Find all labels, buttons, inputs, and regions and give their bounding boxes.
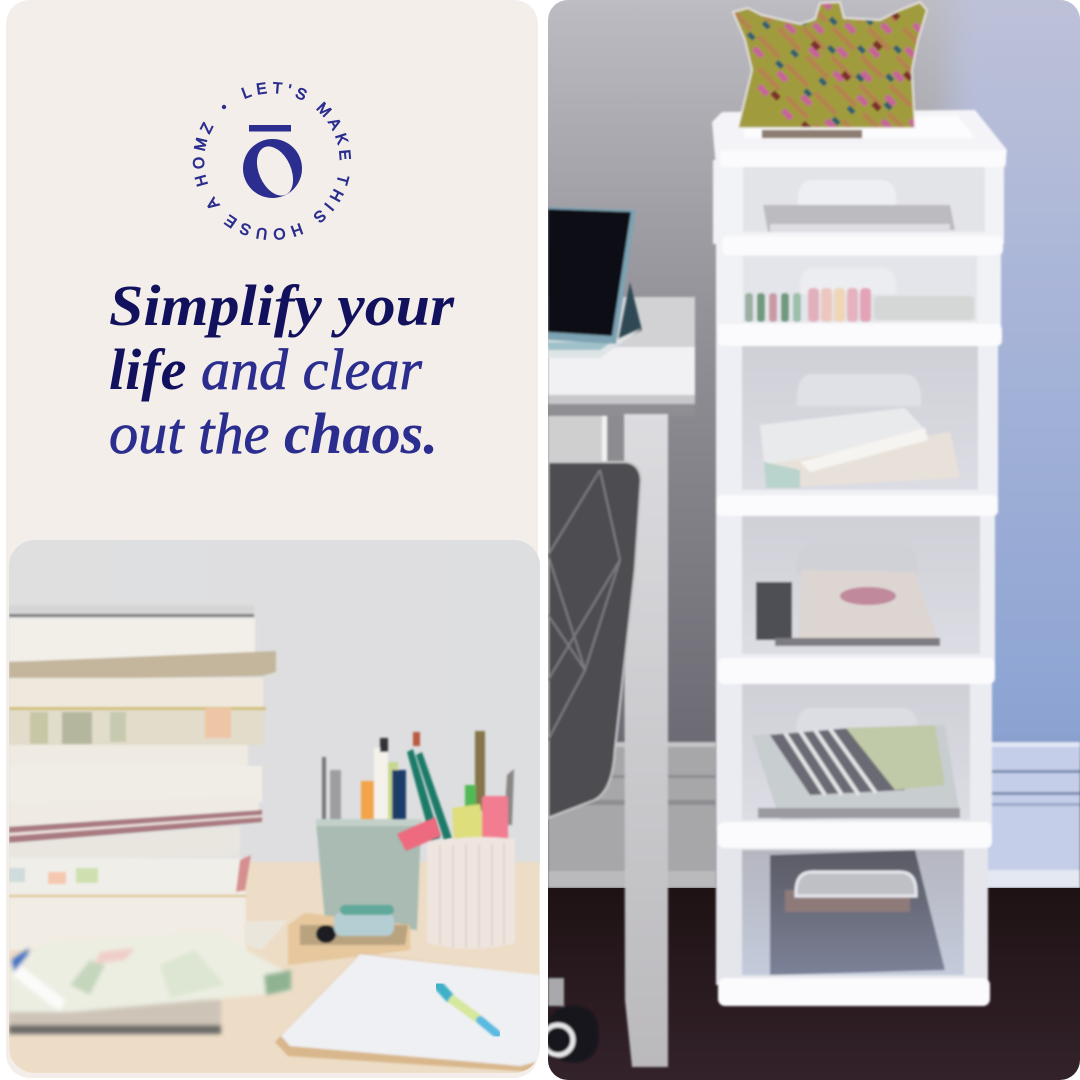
- small book corner: [245, 920, 288, 950]
- drawer 1: [713, 160, 1004, 244]
- ribbed white cup: [427, 837, 515, 949]
- spiral notebook: [275, 953, 540, 1071]
- photo: drawer tower beside desk: [543, 0, 1080, 1080]
- logo dot: [222, 105, 226, 109]
- green metal cup: [316, 819, 422, 930]
- photo: stacked books and pens on desk: [9, 540, 540, 1074]
- heading: [109, 273, 454, 466]
- chair wheel: [543, 978, 598, 1062]
- drawer rims: [716, 150, 1006, 1006]
- patterned bag on top: [725, 0, 935, 140]
- heading line 3: out the chaos.: [109, 401, 438, 466]
- office chair back: [548, 462, 641, 818]
- heading line 1: Simplify your: [109, 273, 454, 338]
- drawer 2 with markers: [716, 238, 1001, 332]
- baseboard left: [548, 742, 716, 888]
- baseboard right: [985, 742, 1080, 888]
- white desk: [548, 297, 695, 466]
- logo circular tagline: LET'S MAKE THIS HOUSE A HOMZ: [192, 82, 352, 240]
- desk surface: [9, 862, 540, 1074]
- panel: cream background: [6, 0, 538, 1078]
- desk leg: [624, 414, 668, 1067]
- logo badge: [192, 82, 352, 240]
- pink washi tape: [397, 817, 441, 851]
- wall: [548, 0, 1080, 890]
- drawer 3 with papers: [716, 332, 998, 504]
- floor: [548, 888, 1080, 1080]
- drawer 4 with folders and scissors: [716, 505, 995, 665]
- wooden tray with tape: [288, 905, 410, 965]
- pens and pencils: [322, 731, 514, 842]
- logo o glyph: [243, 139, 302, 201]
- heading line 2: life and clear: [109, 337, 422, 402]
- tower lid: [712, 110, 1007, 167]
- logo macron bar: [249, 125, 291, 132]
- floral book: [9, 932, 291, 1034]
- book stack: [9, 605, 276, 950]
- drawer 6 with basket: [716, 830, 988, 985]
- drawer 5 with striped files: [716, 665, 992, 831]
- pen on notebook: [439, 986, 497, 1034]
- drawer tower: [712, 110, 1007, 1006]
- tablet on stand: [548, 207, 642, 358]
